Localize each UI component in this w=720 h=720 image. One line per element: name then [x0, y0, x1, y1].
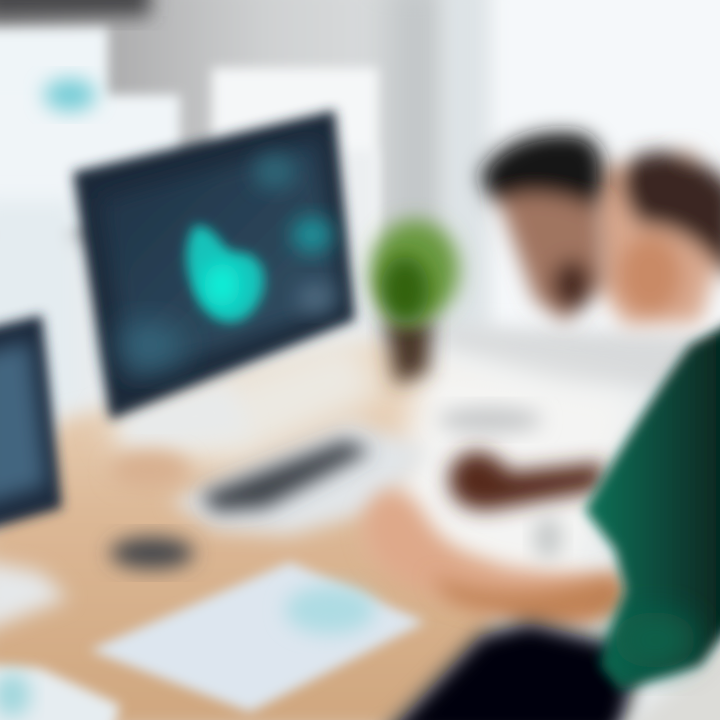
face two: [590, 150, 720, 325]
paper bottom left: [0, 665, 120, 720]
face one: [495, 180, 605, 322]
dark arm: [449, 451, 605, 510]
monitor stand: [105, 335, 385, 465]
icon: teal paper chart: [44, 79, 96, 111]
paper on desk: [90, 562, 425, 712]
tablet left: [0, 315, 62, 532]
monitor frame: [73, 110, 355, 420]
desk: [0, 340, 500, 720]
desktop white area right: [380, 350, 640, 600]
trousers: [380, 622, 640, 720]
person two: [590, 150, 720, 325]
screen glow spots: [253, 154, 297, 190]
plant foliage: [371, 220, 459, 320]
hand on desk: [110, 450, 190, 490]
corner cloth: [610, 630, 720, 720]
wall papers: [0, 28, 378, 410]
monitor: [73, 110, 385, 465]
person one: [480, 132, 605, 322]
green shirt: [585, 320, 720, 690]
chart blob: [186, 225, 264, 322]
left stack of papers: [0, 560, 68, 632]
phone on desk: [110, 537, 194, 569]
tablet on right of desk: [438, 407, 542, 433]
light arm: [362, 490, 630, 622]
keyboard: [170, 420, 430, 535]
phone in hand: [534, 516, 562, 560]
hair two: [621, 151, 720, 285]
hair one: [480, 132, 604, 210]
plant: [371, 220, 459, 385]
monitor screen: [100, 140, 340, 380]
plant pot: [385, 320, 432, 385]
